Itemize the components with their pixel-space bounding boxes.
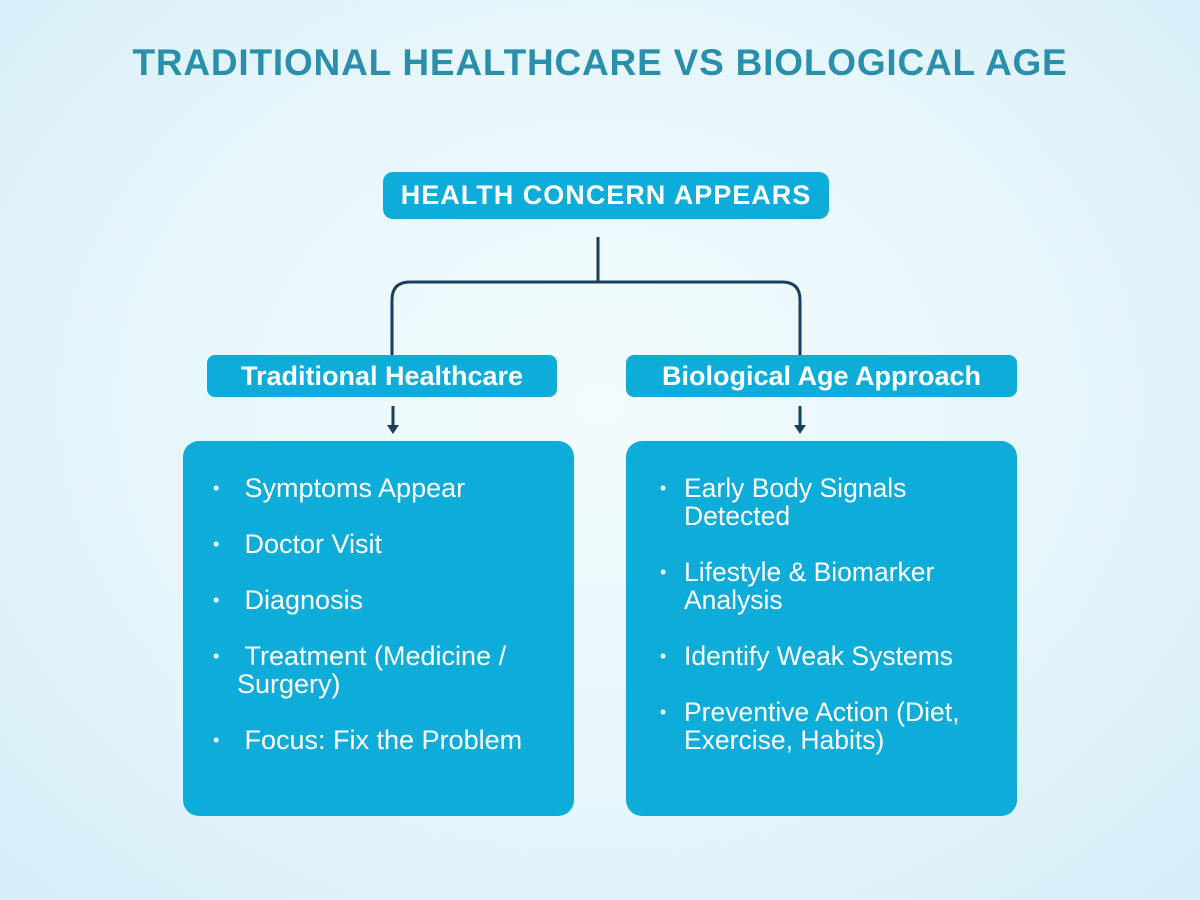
label: traditional healthcare bbox=[207, 355, 557, 397]
panel: biological age steps: Identify Weak Systems bbox=[684, 641, 953, 671]
panel: biological age steps: Early Body Signals bbox=[684, 473, 906, 503]
panel: traditional steps: Doctor Visit bbox=[244, 529, 382, 559]
panel: traditional steps: Diagnosis bbox=[244, 585, 363, 615]
label: biological age approach: Biological Age Approach bbox=[662, 360, 981, 390]
panel: traditional steps: Symptoms Appear bbox=[244, 473, 465, 503]
panel: traditional steps: Treatment (Medicine / bbox=[244, 641, 506, 671]
panel: biological age steps: Exercise, Habits) bbox=[684, 725, 884, 755]
title: TRADITIONAL HEALTHCARE VS BIOLOGICAL AGE bbox=[132, 42, 1068, 83]
label: traditional healthcare: Traditional Healthcare bbox=[241, 360, 523, 390]
panel: biological age steps: Analysis bbox=[684, 585, 783, 615]
panel: biological age steps: Detected bbox=[684, 501, 790, 531]
panel: traditional steps bbox=[183, 441, 574, 816]
panel: biological age steps: Lifestyle & Biomarker bbox=[684, 557, 934, 587]
panel: traditional steps: Surgery) bbox=[237, 669, 341, 699]
panel: biological age steps bbox=[626, 441, 1017, 816]
panel: traditional steps: Focus: Fix the Problem bbox=[244, 725, 522, 755]
panel: biological age steps: Preventive Action (Diet, bbox=[684, 697, 959, 727]
label: biological age approach bbox=[626, 355, 1017, 397]
top box: health concern bbox=[383, 172, 829, 219]
top box: health concern: HEALTH CONCERN APPEARS bbox=[401, 180, 811, 210]
